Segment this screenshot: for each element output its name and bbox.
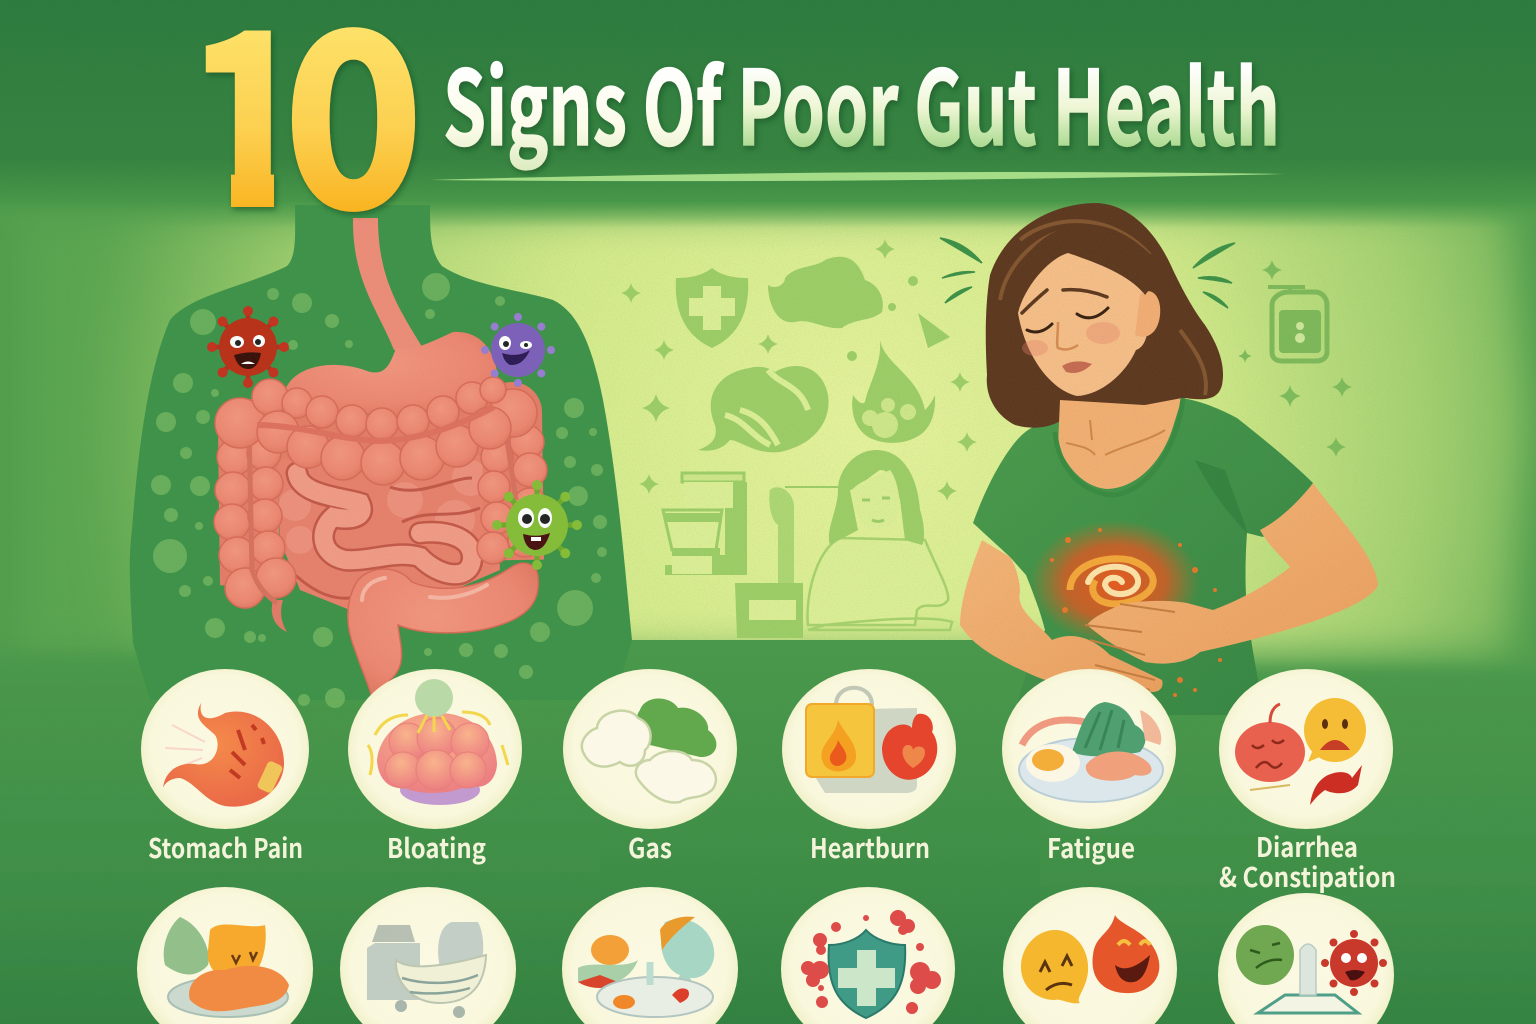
body dots: [151, 273, 607, 708]
sign: diarrhea and constipation: Diarrhea: [1256, 826, 1358, 865]
body silhouette: [130, 205, 632, 708]
colon: descending: [477, 425, 547, 564]
sigmoid highlight: [362, 578, 487, 600]
colon: transverse: [215, 377, 537, 485]
icon: cloud: [768, 257, 883, 328]
collar: [1055, 398, 1183, 495]
appendix: [272, 600, 287, 632]
left arm and hand: [960, 540, 1163, 692]
title text: Signs Of Poor Gut Health: [443, 26, 1280, 175]
finger lines: [1085, 604, 1175, 690]
colon mass: [248, 412, 514, 585]
virus: purple: [485, 317, 551, 383]
sign: fatigue: [1002, 669, 1176, 866]
sign: medical cart: [340, 887, 516, 1024]
signs row 2: [137, 887, 1394, 1024]
stomach: [285, 332, 498, 416]
closed eyes: [1027, 308, 1108, 332]
box: [735, 583, 803, 638]
right arm and hand: [1087, 483, 1378, 664]
shirt: [973, 398, 1313, 715]
small intestine: [278, 455, 500, 610]
blush: [1022, 322, 1120, 356]
collarbones: [1066, 420, 1165, 455]
sign: bloating: Bloating: [387, 827, 486, 866]
title: [206, 27, 1282, 219]
virus: red: [212, 311, 284, 383]
icon: toilet: [663, 473, 747, 575]
flame core: [862, 398, 916, 438]
intestines illustration: [214, 218, 547, 703]
virus: green: [497, 485, 577, 565]
hair back: [986, 203, 1223, 428]
icon: bottle: [1268, 285, 1327, 361]
faded woman sketch: [807, 450, 952, 630]
sign: gas: Gas: [628, 827, 672, 866]
colon: ascending: [214, 436, 296, 608]
colon band lines: [249, 428, 516, 603]
title underline: [430, 172, 1285, 181]
sign: diarrhea and constipation: [1219, 669, 1396, 895]
nose: [1057, 322, 1078, 349]
shirt folds: [1195, 460, 1247, 533]
small dots: [847, 276, 918, 361]
title number 10: [206, 27, 419, 219]
neck and chest: [1058, 398, 1182, 489]
sparkle stars: [621, 239, 977, 501]
icon: triangle: [918, 313, 950, 348]
speech bubble waves: [725, 370, 808, 445]
sign: skin and germs: [1218, 893, 1394, 1024]
brows: [1022, 290, 1107, 313]
esophagus: [353, 218, 424, 350]
sign: stomach pain: Stomach Pain: [148, 827, 303, 866]
sparkle stars: right: [1238, 260, 1352, 457]
faded symptom icons: [621, 239, 1352, 638]
sign: heartburn: Heartburn: [810, 827, 930, 866]
sign: fatigue: Fatigue: [1047, 827, 1135, 866]
sign: tiredness figure: [137, 887, 313, 1024]
sign: mood emojis: [1003, 887, 1177, 1024]
icon: flame: [852, 340, 935, 443]
sigmoid colon and rectum: [348, 563, 538, 703]
mouth: [1062, 361, 1092, 373]
hair front: [1010, 224, 1165, 313]
signs row 1: [141, 669, 1396, 895]
sign: food plate and globe: [562, 887, 738, 1024]
colon band: [257, 407, 494, 441]
sign: stomach pain: [141, 669, 309, 866]
woman with stomach pain: [940, 203, 1378, 715]
icon: shield: [676, 268, 748, 348]
swirl glow: [1030, 520, 1222, 697]
icon: speech bubble: [698, 366, 829, 452]
sign: immune shield: [781, 887, 955, 1024]
sign: diarrhea and constipation: & Constipation: [1219, 856, 1396, 895]
ear: [1135, 291, 1160, 337]
paper roll: [769, 487, 838, 583]
sign: heartburn: [782, 669, 956, 866]
hair highlight: [1000, 221, 1206, 395]
sign: gas: [563, 669, 737, 866]
face: [1018, 253, 1148, 396]
pain lines: [940, 238, 1235, 308]
sign: bloating: [348, 669, 522, 866]
